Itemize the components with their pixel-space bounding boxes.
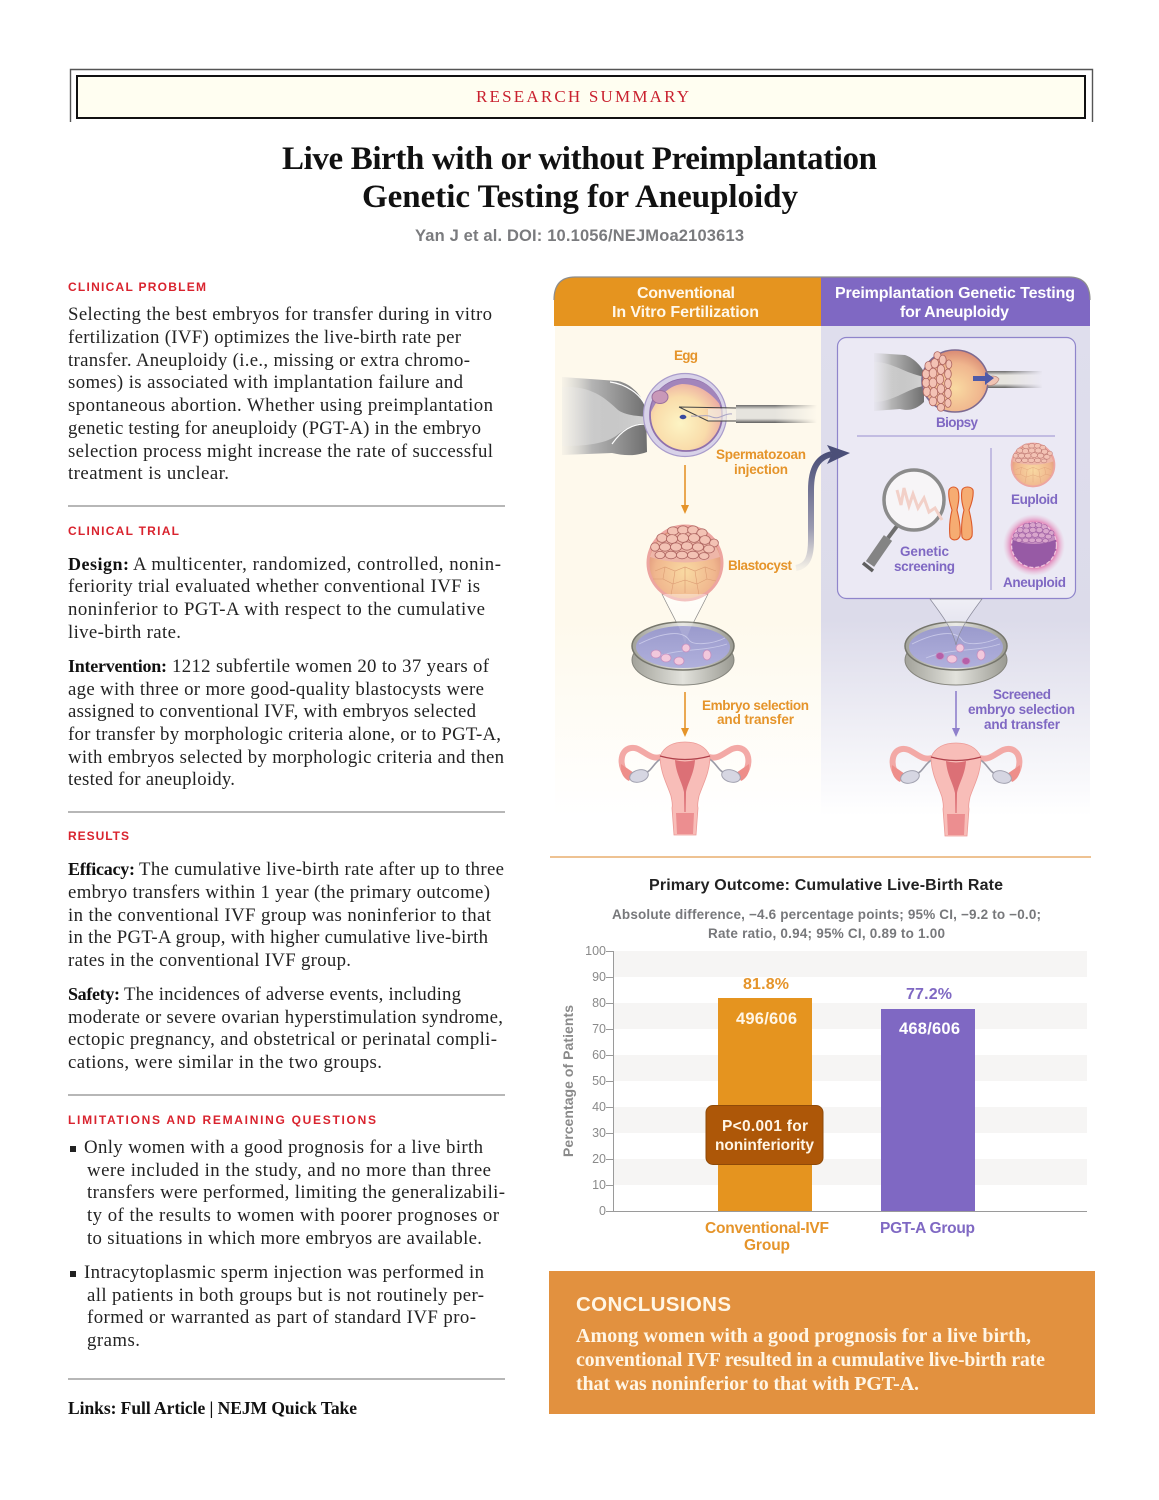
- section: clinical problem: selection process might increase the rate of successful: [68, 441, 493, 462]
- panel: conclusions: Among women with a good prognosis for a live birth,: [576, 1325, 1031, 1347]
- panel: conclusions: [549, 1271, 1095, 1414]
- y axis tick labels: 60: [592, 1048, 606, 1062]
- label: spermatozoan injection: Spermatozoan: [716, 447, 806, 462]
- header: conventional IVF: [554, 277, 821, 326]
- section: clinical problem: CLINICAL PROBLEM: [68, 280, 206, 294]
- section: clinical trial: CLINICAL TRIAL: [68, 524, 179, 538]
- label: spermatozoan injection: injection: [734, 462, 788, 477]
- y axis tick labels: 90: [592, 970, 606, 984]
- citation line: Yan J et al. DOI: 10.1056/NEJMoa2103613: [415, 227, 744, 245]
- section: clinical problem: genetic testing for aneuploidy (PGT-A) in the embryo: [68, 418, 481, 439]
- icon: uterus right: [892, 743, 1020, 836]
- section: clinical trial: with embryos selected by morphologic criteria and then: [68, 747, 505, 768]
- title: Live Birth with or without Preimplantation: [282, 141, 877, 177]
- section: clinical problem: [68, 280, 494, 484]
- panel: conclusions: CONCLUSIONS: [576, 1293, 731, 1316]
- header: conventional IVF: In Vitro Fertilization: [612, 304, 759, 321]
- label: genetic screening: [894, 544, 955, 574]
- icon: magnifier and chromosome: [863, 470, 973, 571]
- arrow: dish to uterus right: [952, 691, 960, 737]
- section: clinical trial: Intervention:: [68, 656, 167, 676]
- label: screened embryo selection and transfer: [968, 687, 1075, 732]
- section: clinical trial: for transfer by morphologic criteria alone, or to PGT-A,: [68, 724, 501, 745]
- icon: blastocyst: [648, 526, 722, 600]
- chart subtitle: Absolute difference, −4.6 percentage points; 95% CI, −9.2 to −0.0;: [612, 907, 1041, 922]
- label: genetic screening: Genetic: [900, 544, 949, 559]
- section: clinical problem: treatment is unclear.: [68, 463, 229, 484]
- panel: testing box: [838, 338, 1076, 598]
- y axis tick labels: 20: [592, 1152, 606, 1166]
- section: clinical problem: transfer. Aneuploidy (i.e., missing or extra chromo-: [68, 350, 470, 371]
- section: clinical trial: Design:: [68, 554, 129, 574]
- section: clinical trial: feriority trial evaluated whether conventional IVF is: [68, 576, 480, 597]
- cone: blastocyst to dish: [662, 594, 708, 645]
- x axis labels: PGT-A Group: [880, 1220, 975, 1237]
- x axis labels: Group: [744, 1237, 790, 1254]
- icon: aneuploid embryo: [1003, 514, 1065, 576]
- section: clinical trial: assigned to conventional IVF, with embryos selected: [68, 701, 477, 722]
- y axis title: Percentage of Patients: [560, 1005, 576, 1157]
- section: results: in the PGT-A group, with higher cumulative live-birth: [68, 927, 489, 948]
- panel: conclusions: that was noninferior to that with PGT-A.: [576, 1373, 919, 1395]
- section: limitations and remaining questions: were included in the study, and no more than three: [87, 1160, 491, 1181]
- label: egg: Egg: [674, 348, 698, 363]
- section: results: The cumulative live-birth rate after up to three: [139, 859, 504, 880]
- arrow: egg to blastocyst: [681, 465, 689, 514]
- callout: p value: noninferiority: [715, 1137, 814, 1154]
- section: results: moderate or severe ovarian hyperstimulation syndrome,: [68, 1007, 503, 1028]
- section: clinical trial: [68, 524, 505, 790]
- label: embryo selection and transfer: Embryo selection: [702, 698, 809, 713]
- label: genetic screening: screening: [894, 559, 955, 574]
- icon: biopsy: [874, 350, 1043, 412]
- section: clinical problem: fertilization (IVF) optimizes the live-birth rate per: [68, 327, 462, 348]
- section: results: in the conventional IVF group was noninferior to that: [68, 905, 492, 926]
- x axis labels: [705, 1220, 975, 1254]
- panel: conventional IVF background: [555, 326, 821, 816]
- label: embryo selection and transfer: and transfer: [717, 712, 795, 727]
- section: clinical problem: somes) is associated with implantation failure and: [68, 372, 464, 393]
- y axis tick labels: 40: [592, 1100, 606, 1114]
- chart subtitle: Rate ratio, 0.94; 95% CI, 0.89 to 1.00: [708, 926, 945, 941]
- bar: conventional IVF: 81.8%: [743, 976, 789, 993]
- title: Genetic Testing for Aneuploidy: [362, 179, 798, 215]
- label: spermatozoan injection: [716, 447, 806, 477]
- section: clinical trial: age with three or more good-quality blastocysts were: [68, 679, 484, 700]
- section: results: embryo transfers within 1 year (the primary outcome): [68, 882, 490, 903]
- label: blastocyst: Blastocyst: [728, 558, 792, 573]
- y axis tick labels: [585, 944, 606, 1218]
- icon: uterus left: [621, 742, 749, 835]
- header: PGT-A: Preimplantation Genetic Testing: [835, 285, 1075, 302]
- section: clinical problem: Selecting the best embryos for transfer during in vitro: [68, 304, 492, 325]
- bar: conventional IVF: [718, 976, 812, 1211]
- section: limitations and remaining questions: ty of the results to women with poorer prognoses or: [87, 1205, 500, 1226]
- section: results: [68, 829, 504, 1073]
- section: results: Safety:: [68, 984, 120, 1004]
- y axis tick labels: 80: [592, 996, 606, 1010]
- header banner: RESEARCH SUMMARY: [476, 87, 689, 106]
- section: limitations and remaining questions: LIMITATIONS AND REMAINING QUESTIONS: [68, 1113, 376, 1127]
- section: results: rates in the conventional IVF group.: [68, 950, 351, 971]
- icon: euploid embryo: [1012, 443, 1054, 486]
- section: clinical problem: spontaneous abortion. Whether using preimplantation: [68, 395, 494, 416]
- label: aneuploid: Aneuploid: [1003, 575, 1066, 590]
- callout: p value: [706, 1106, 823, 1164]
- y axis tick labels: 10: [592, 1178, 606, 1192]
- chart: primary outcome: [560, 877, 1087, 1254]
- bar: PGT-A: 77.2%: [906, 986, 952, 1003]
- label: screened embryo selection and transfer: embryo selection: [968, 702, 1075, 717]
- section: limitations and remaining questions: [68, 1113, 505, 1351]
- section: clinical trial: tested for aneuploidy.: [68, 769, 235, 790]
- section: clinical trial: noninferior to PGT-A with respect to the cumulative: [68, 599, 485, 620]
- bar: PGT-A: 468/606: [899, 1020, 960, 1038]
- icon: culture dish left: [632, 594, 734, 685]
- section: limitations and remaining questions: transfers were performed, limiting the generalizabili-: [87, 1182, 505, 1203]
- label: screened embryo selection and transfer: and transfer: [984, 717, 1061, 732]
- section: limitations and remaining questions: Intracytoplasmic sperm injection was performed in: [84, 1262, 485, 1283]
- section: results: The incidences of adverse events, including: [124, 984, 462, 1005]
- section: clinical trial: live-birth rate.: [68, 622, 181, 643]
- chart subtitle: [612, 907, 1041, 941]
- x axis labels: Conventional-IVF: [705, 1220, 829, 1237]
- title: [282, 141, 877, 215]
- y axis tick labels: 50: [592, 1074, 606, 1088]
- header: PGT-A: [821, 277, 1090, 326]
- label: embryo selection and transfer: [702, 698, 809, 727]
- y axis tick labels: 30: [592, 1126, 606, 1140]
- section: clinical trial: A multicenter, randomized, controlled, nonin-: [133, 554, 501, 575]
- label: screened embryo selection and transfer: Screened: [993, 687, 1051, 702]
- y axis tick labels: 100: [585, 944, 606, 958]
- section: results: ectopic pregnancy, and obstetrical or perinatal compli-: [68, 1029, 497, 1050]
- section: limitations and remaining questions: Only women with a good prognosis for a live birth: [84, 1137, 484, 1158]
- bar: conventional IVF: 496/606: [736, 1010, 797, 1028]
- arrow: curved arrow to PGT-A biopsy: [796, 445, 850, 568]
- section: results: RESULTS: [68, 829, 129, 843]
- icon: egg with holding pipette and injection needle: [562, 374, 817, 456]
- section: results: cations, were similar in the two groups.: [68, 1052, 382, 1073]
- icon: culture dish right: [905, 599, 1007, 685]
- panel: PGT-A background: [821, 326, 1090, 816]
- chart title: Primary Outcome: Cumulative Live-Birth Rate: [649, 877, 1003, 894]
- label: biopsy: Biopsy: [936, 415, 978, 430]
- header: PGT-A: for Aneuploidy: [900, 304, 1009, 321]
- panel: study design illustration: [554, 277, 1090, 836]
- section: limitations and remaining questions: all patients in both groups but is not routinely per-: [87, 1285, 484, 1306]
- panel: conclusions: conventional IVF resulted in a cumulative live-birth rate: [576, 1349, 1045, 1371]
- y axis tick labels: 0: [599, 1204, 606, 1218]
- section: clinical trial: 1212 subfertile women 20 to 37 years of: [172, 656, 490, 677]
- section: results: Efficacy:: [68, 859, 135, 879]
- label: euploid: Euploid: [1011, 492, 1058, 507]
- header: conventional IVF: Conventional: [637, 285, 735, 302]
- y axis tick labels: 70: [592, 1022, 606, 1036]
- links: Links: Full Article | NEJM Quick Take: [68, 1398, 357, 1418]
- header banner: [70, 70, 1092, 122]
- section: limitations and remaining questions: formed or warranted as part of standard IVF pro-: [87, 1307, 476, 1328]
- section: limitations and remaining questions: to situations in which more embryos are available.: [87, 1228, 482, 1249]
- callout: p value: P<0.001 for: [722, 1118, 808, 1135]
- bar: PGT-A: [881, 986, 975, 1211]
- section: limitations and remaining questions: grams.: [87, 1330, 140, 1351]
- arrow: dish to uterus left: [681, 692, 689, 737]
